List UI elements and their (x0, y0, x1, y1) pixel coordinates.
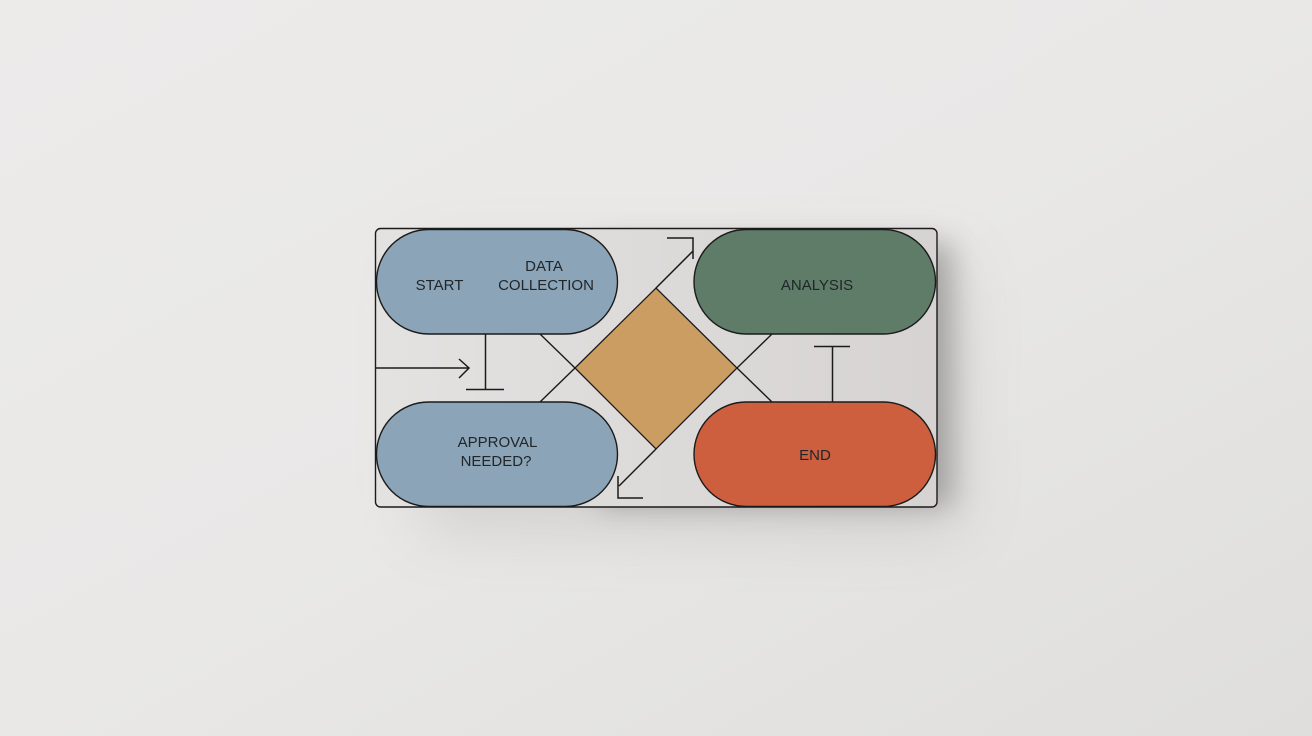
label: analysis: ANALYSIS (781, 277, 853, 294)
label: data collection: DATA (525, 258, 563, 275)
pill: end (694, 402, 936, 506)
connector: blocked line above end pill (814, 346, 850, 402)
label: start: START (416, 277, 463, 294)
decision diamond (575, 288, 737, 449)
label: data collection: COLLECTION (498, 277, 594, 294)
label: end: END (799, 447, 831, 464)
arrow: entry into start (376, 359, 469, 378)
arrow: diamond to analysis (656, 238, 693, 288)
arrow: diamond to approval (618, 449, 656, 498)
panel: flowchart board (376, 228, 937, 507)
connector lines around decision diamond (540, 334, 772, 402)
pill: analysis (694, 230, 936, 334)
pill: approval needed (376, 402, 618, 506)
pill: start and data collection (376, 230, 618, 334)
connector: blocked line under start pill (466, 334, 504, 390)
label: approval needed: NEEDED? (461, 453, 531, 470)
label: approval needed: APPROVAL (458, 434, 537, 451)
